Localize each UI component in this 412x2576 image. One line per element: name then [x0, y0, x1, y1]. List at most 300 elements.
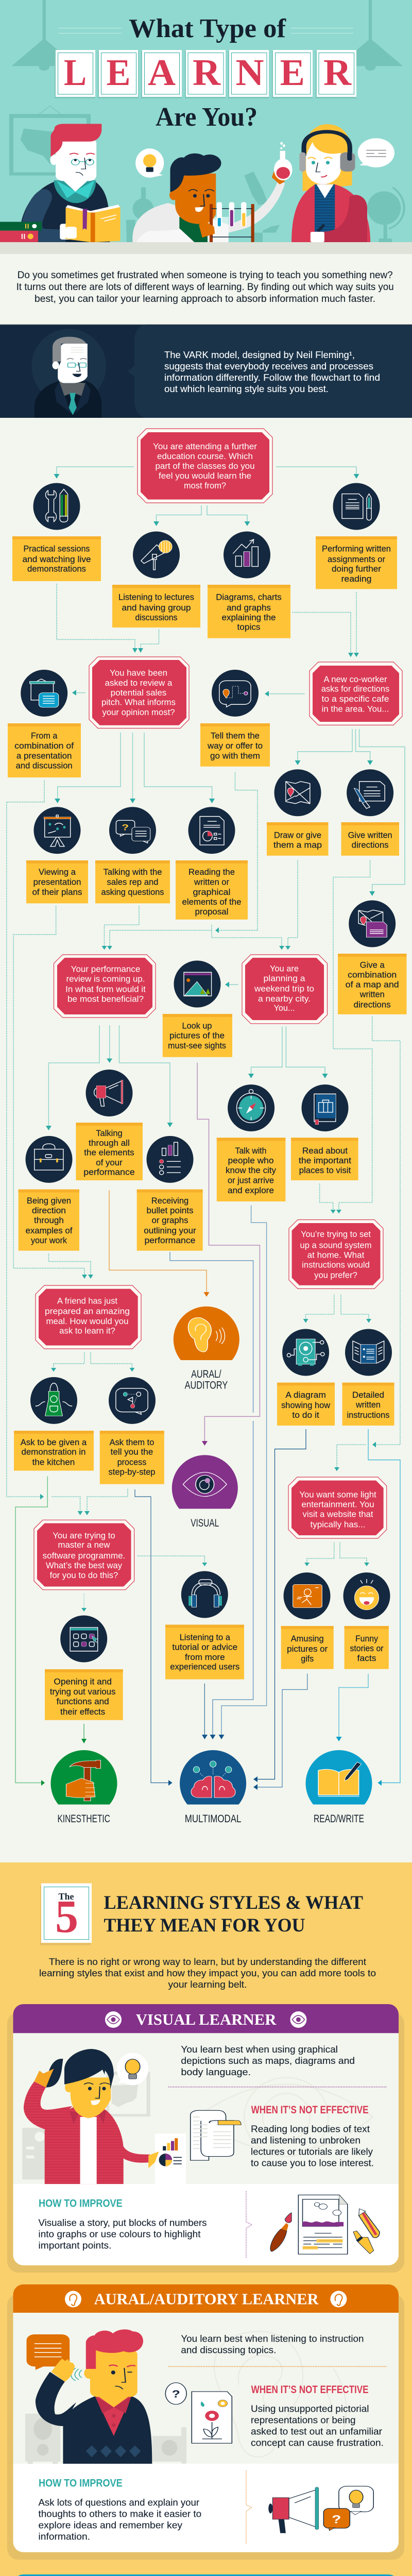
- intro text: your learning belt.: [168, 1979, 247, 1990]
- icon: presentation board: [34, 807, 80, 854]
- how to improve: Visualise a story, put blocks of numbers: [38, 2217, 207, 2228]
- icon: headphones: [181, 1571, 228, 1618]
- label box: and having group: [122, 603, 191, 613]
- label box: asking questions: [101, 888, 164, 897]
- VARK text: [164, 350, 380, 394]
- arrow: question 1 to practical: [54, 467, 134, 479]
- illustration: student with headphones: [291, 124, 394, 242]
- option: combination of map and written: [338, 901, 407, 1014]
- question 4: In what form would it: [65, 985, 146, 994]
- VARK text: information differently. Follow the flowchart to find: [164, 372, 380, 383]
- label box: [277, 1383, 335, 1426]
- label box: [14, 1431, 94, 1471]
- option: a diagram: [277, 1329, 335, 1426]
- VARK text: suggests that everybody receives and processes: [164, 361, 373, 371]
- label: [185, 1368, 228, 1391]
- question 5: You...: [274, 1004, 295, 1013]
- label box: doing further: [332, 565, 382, 574]
- icon: folded map: [274, 769, 321, 816]
- label box: your work: [31, 1236, 67, 1245]
- label box: sales rep and: [107, 878, 159, 887]
- option: read about places: [291, 1084, 358, 1180]
- label box: know the city: [226, 1166, 277, 1175]
- panel: hero: [0, 0, 412, 254]
- icon: board and chat: [21, 670, 67, 717]
- label box: the kitchen: [32, 1458, 75, 1467]
- how to improve: thoughts to others to make it easier to: [38, 2509, 201, 2519]
- label box: and explore: [228, 1186, 274, 1195]
- label box: [267, 822, 329, 856]
- heading: LEARNER letter cards: E: [106, 52, 131, 93]
- arrow: reading to weekend trip: [212, 925, 284, 950]
- label box: through: [34, 1216, 64, 1225]
- how to improve: [38, 2470, 252, 2544]
- label box: [200, 723, 270, 767]
- header: [13, 2574, 399, 2576]
- question 2: pitch. What informs: [101, 698, 176, 707]
- arrow: sound system to written instructions: [341, 1295, 371, 1323]
- question 2: asked to review a: [105, 679, 173, 688]
- label box: [163, 1014, 232, 1057]
- icon: running figure screen: [283, 1572, 331, 1619]
- intro text: There is no right or wrong way to learn, but by understanding the different: [49, 1956, 366, 1967]
- arrow: weekend trip to read about: [286, 1026, 328, 1078]
- label box: [95, 860, 170, 903]
- label box: [338, 954, 407, 1014]
- label box: process: [117, 1458, 146, 1467]
- option: viewing a presentation: [26, 807, 88, 903]
- label box: experienced users: [170, 1663, 239, 1672]
- heading: LEARNER letter cards: A: [148, 52, 176, 93]
- icon: chat with route: [109, 1377, 156, 1424]
- arrow: question 1 to lectures: [153, 505, 201, 526]
- option: practical sessions: [12, 483, 101, 581]
- question 6: You’re trying to set: [301, 1230, 371, 1239]
- label box: written: [359, 990, 385, 999]
- arrow: performance to bullet points: [119, 1025, 173, 1127]
- label: AURAL/: [191, 1368, 221, 1380]
- label box: direction: [32, 1206, 66, 1215]
- arrow: combination to friend meal: [7, 781, 44, 1499]
- when it's not effective: representations or being: [251, 2415, 355, 2426]
- result: multimodal: [180, 1750, 246, 1825]
- illustration: paintbrush, document, pencil, highlighter: [270, 2195, 380, 2254]
- option: pictures or gifs: [281, 1572, 334, 1669]
- question 5: weekend trip to: [254, 985, 314, 994]
- icon: brain: [191, 1761, 235, 1798]
- option: examples of work: [19, 1136, 79, 1251]
- arrow: talk with people to multimodal: [218, 1206, 267, 1739]
- question 9: typically has...: [310, 1520, 366, 1530]
- label box: outlining your: [144, 1226, 196, 1235]
- question 1: You are attending a further: [153, 442, 258, 451]
- question 7: ask to learn it?: [59, 1326, 115, 1335]
- illustration: aural learner character: [25, 2329, 232, 2464]
- question 1: feel you would learn the: [159, 471, 251, 481]
- question 9: visit a website that: [303, 1510, 373, 1519]
- card: read write learner: [7, 2574, 404, 2576]
- label box: functions and: [57, 1697, 109, 1706]
- VARK text: out which learning style suits you best.: [164, 384, 329, 394]
- label box: and graphs: [227, 603, 271, 613]
- question 8: [34, 1520, 134, 1590]
- intro text: [39, 1956, 376, 1990]
- label box: Being given: [27, 1196, 71, 1206]
- question 3: [310, 662, 402, 725]
- option: talk with people: [217, 1084, 285, 1201]
- question 9: You want some light: [299, 1490, 376, 1500]
- option: opening it: [45, 1616, 123, 1720]
- label box: Opening it and: [54, 1677, 112, 1687]
- label box: combination: [348, 971, 397, 980]
- label box: Listening to lectures: [118, 593, 194, 602]
- option: talking through: [76, 1070, 143, 1180]
- label box: them a map: [273, 841, 322, 850]
- question 4: [54, 955, 156, 1018]
- label box: directions: [352, 841, 389, 850]
- label box: of your: [96, 1158, 123, 1167]
- label box: from more: [185, 1653, 225, 1662]
- option: demonstration: [14, 1377, 94, 1471]
- label box: [76, 1123, 143, 1180]
- result: aural: [174, 1307, 239, 1391]
- icon: map and note: [349, 901, 396, 947]
- header: AURAL/AUDITORY LEARNER: [94, 2290, 319, 2308]
- arrow: entertainment to funny stories: [340, 1543, 369, 1566]
- option: talking with sales rep: [95, 807, 170, 903]
- result: kinesthetic: [51, 1750, 117, 1825]
- card: The 5: 5: [55, 1891, 78, 1942]
- label box: stories or: [350, 1644, 384, 1653]
- arrow: sales pitch to talking: [130, 733, 135, 803]
- icon: eye: [183, 1472, 227, 1497]
- question 8: You are trying to: [53, 1531, 115, 1540]
- panel: VARK model: [0, 324, 412, 418]
- label box: [281, 1626, 334, 1669]
- question 9: entertainment. You: [301, 1500, 374, 1509]
- heading: learning styles: THEY MEAN FOR YOU: [104, 1915, 305, 1936]
- intro paragraph: best, you can tailor your learning approach to absorb information much faster.: [35, 293, 375, 304]
- arrow: step by step to software: [84, 1489, 128, 1515]
- label box: [137, 1190, 203, 1251]
- label box: reading: [341, 574, 372, 584]
- label box: to do it: [292, 1411, 319, 1420]
- how to improve: into graphs or use colours to highlight: [38, 2229, 201, 2239]
- label box: [341, 822, 399, 856]
- label box: graphical: [193, 888, 231, 897]
- heading: Are You?: Are You?: [156, 103, 258, 132]
- arrow: performance to examples: [46, 1025, 99, 1130]
- description: depictions such as maps, diagrams and: [181, 2056, 355, 2066]
- label box: discussions: [135, 613, 177, 622]
- label box: proposal: [195, 907, 229, 917]
- icon: bar chart: [224, 532, 270, 578]
- question 2: [89, 657, 189, 728]
- icon: brochure: [345, 1329, 392, 1376]
- when it's not effective: and listening to unbroken: [251, 2135, 360, 2145]
- label box: Receiving: [151, 1196, 188, 1206]
- heading: LEARNER letter cards: L: [64, 52, 87, 93]
- label box: Talk with: [235, 1146, 267, 1156]
- arrow: diagrams to directions: [293, 613, 353, 657]
- question 9: [288, 1477, 387, 1538]
- how to improve: Ask lots of questions and explain your: [38, 2498, 199, 2508]
- label box: a presentation: [16, 752, 72, 761]
- arrow: sales pitch to viewing: [55, 733, 121, 803]
- illustration: aural learner character: ?: [172, 2388, 180, 2400]
- when it's not effective: [251, 2384, 384, 2448]
- label box: A diagram: [285, 1391, 326, 1400]
- label box: Reading the: [188, 868, 235, 877]
- how to improve: HOW TO IMPROVE: [39, 2198, 123, 2209]
- question 8: for you to do this?: [50, 1571, 118, 1580]
- question 6: instructions would: [302, 1261, 370, 1270]
- label box: Listening to a: [180, 1633, 231, 1642]
- label box: Detailed: [352, 1391, 384, 1400]
- illustration: reading man with book stack: [0, 124, 121, 242]
- label box: Tell them the: [211, 732, 260, 741]
- label box: [45, 1669, 123, 1720]
- intro paragraph: [16, 269, 394, 304]
- label box: facts: [357, 1654, 376, 1663]
- question 4: review is coming up.: [66, 975, 145, 984]
- label box: performance: [83, 1167, 135, 1177]
- label box: tutorial or advice: [173, 1642, 237, 1652]
- arrow: directions to tell them: [265, 691, 305, 697]
- label box: [345, 1626, 389, 1669]
- icon: app grid: [60, 1616, 107, 1662]
- label box: pictures of the: [169, 1031, 225, 1041]
- question 3: in the area. You...: [322, 705, 389, 714]
- icon: document and pen: [333, 483, 380, 530]
- label box: Draw or give: [274, 831, 321, 840]
- question 6: at home. What: [307, 1251, 365, 1260]
- arrow: funny stories to read write: [336, 1674, 368, 1741]
- arrow: tutorial to multimodal: [202, 1684, 208, 1739]
- question 2: You have been: [110, 669, 167, 678]
- arrow: pictures to visual result: [197, 1062, 260, 1446]
- label box: Diagrams, charts: [216, 593, 282, 602]
- question 7: prepared an amazing: [45, 1307, 130, 1316]
- arrow: friend meal to step by step: [91, 1352, 135, 1371]
- icon: document with pie chart: [188, 807, 235, 854]
- option: step by step: [100, 1377, 164, 1484]
- label box: bullet points: [146, 1206, 194, 1215]
- how to improve: HOW TO IMPROVE: [39, 2477, 123, 2489]
- description: body language.: [181, 2067, 251, 2077]
- when it's not effective: [251, 2104, 374, 2168]
- question 1: [138, 429, 272, 503]
- label box: Talking with the: [103, 868, 162, 877]
- arrow: sales pitch to combination: [72, 690, 85, 696]
- illustration: scientist with test tubes: [132, 142, 293, 242]
- option: tell them: [200, 670, 270, 767]
- arrow: read about to sound system: [320, 1184, 336, 1214]
- question 1: part of the classes do you: [156, 462, 254, 471]
- label box: From a: [31, 732, 58, 741]
- icon: wrench and pencil: [33, 483, 80, 530]
- icon: question chat: [109, 807, 156, 854]
- illustration: Neil Fleming portrait: [31, 329, 106, 418]
- question 1: most from?: [184, 481, 226, 490]
- label: READ/WRITE: [314, 1813, 364, 1825]
- option: bullet points: [137, 1136, 203, 1251]
- when it's not effective: Using unsupported pictorial: [251, 2404, 369, 2414]
- header: [13, 2004, 399, 2033]
- option: tutorial: [165, 1571, 244, 1680]
- icon: chart and list: [146, 1136, 194, 1183]
- label box: Viewing a: [39, 868, 76, 877]
- question 5: You are: [270, 964, 299, 974]
- question 5: [242, 955, 328, 1024]
- label box: and watching live: [23, 555, 91, 564]
- label box: way or offer to: [207, 741, 263, 751]
- label box: places to visit: [299, 1166, 351, 1175]
- label box: [100, 1431, 164, 1484]
- label box: [217, 1138, 285, 1201]
- arrow: diagram to multimodal: [253, 1429, 306, 1782]
- watermark eye: [197, 2077, 373, 2157]
- flowchart: [7, 429, 407, 1825]
- label box: Read about: [302, 1146, 348, 1156]
- arrow: opening it to kinesthetic: [81, 1724, 87, 1743]
- label box: showing how: [281, 1401, 330, 1410]
- intro paragraph: Do you sometimes get frustrated when someone is trying to teach you something new?: [18, 269, 393, 281]
- question 8: What’s the best way: [46, 1561, 123, 1570]
- question 2: potential sales: [111, 688, 166, 698]
- heading: LEARNER letter cards: N: [236, 52, 264, 93]
- when it's not effective: to cause you to lose interest.: [251, 2158, 374, 2168]
- question 6: [289, 1220, 383, 1289]
- how to improve: important points.: [38, 2240, 111, 2250]
- arrow: weekend trip to pictures: [225, 982, 238, 987]
- icon: route in speech bubble: [212, 670, 259, 717]
- option: written directions: [341, 769, 399, 856]
- label box: Practical sessions: [24, 545, 90, 554]
- result: visual: [172, 1455, 238, 1529]
- option: detailed instructions: [342, 1329, 394, 1426]
- label box: [165, 1625, 244, 1680]
- label box: [112, 585, 200, 628]
- icon: briefcase: [26, 1136, 72, 1183]
- question 3: to a specific cafe: [321, 694, 389, 704]
- label box: written: [355, 1400, 381, 1410]
- VARK text: The VARK model, designed by Neil Fleming¹,: [164, 350, 355, 360]
- arrow: bullet points to multimodal: [170, 1252, 253, 1739]
- icon: megaphone: [85, 1070, 133, 1116]
- arrow: viewing to friend meal: [13, 906, 87, 1279]
- question 8: software programme.: [43, 1551, 125, 1561]
- result: read write: [306, 1750, 372, 1825]
- arrow: entertainment to pictures or gifs: [304, 1543, 334, 1566]
- label: VISUAL: [191, 1517, 219, 1529]
- label box: must-see sights: [168, 1041, 226, 1050]
- label box: step-by-step: [108, 1468, 156, 1477]
- label box: go with them: [210, 752, 260, 761]
- icon: question chat: ?: [122, 823, 129, 833]
- description: You learn best when listening to instruction: [181, 2334, 364, 2344]
- arrow: demonstration to kinesthetic: [15, 1476, 47, 1786]
- option: draw a map: [267, 769, 329, 856]
- arrow: software to opening it: [81, 1594, 87, 1612]
- label box: demonstration in: [22, 1448, 85, 1457]
- label: MULTIMODAL: [185, 1813, 241, 1825]
- card: visual learner: [7, 2004, 404, 2273]
- when it's not effective: WHEN IT’S NOT EFFECTIVE: [251, 2104, 369, 2116]
- label box: [19, 1190, 79, 1251]
- question 7: [36, 1285, 141, 1349]
- label box: explaining the: [221, 613, 276, 622]
- illustration: visual learner character: [22, 2049, 241, 2184]
- header: VISUAL LEARNER: [136, 2010, 277, 2028]
- option: combination of presentation: [8, 670, 81, 777]
- question 7: meal. How would you: [46, 1317, 129, 1326]
- label box: people who: [228, 1156, 274, 1165]
- label box: directions: [354, 1001, 391, 1010]
- label box: [26, 860, 88, 903]
- arrow: sound system to diagram: [303, 1295, 334, 1323]
- card: The 5: The: [59, 1891, 74, 1902]
- icon: apron: [30, 1377, 77, 1424]
- label box: their effects: [60, 1707, 105, 1717]
- arrow: map to weekend trip: [285, 860, 298, 950]
- label box: elements of the: [182, 897, 241, 907]
- arrow: directions to map: [295, 729, 352, 765]
- arrow: combination of map to entertainment: [334, 1016, 400, 1471]
- label box: Performing written: [322, 545, 391, 554]
- label box: Talking: [96, 1129, 123, 1138]
- arrow: written to directions: [354, 592, 359, 657]
- icon: picture of mountains: [174, 960, 220, 1008]
- when it's not effective: Reading long bodies of text: [251, 2124, 370, 2134]
- question 1: education course. Which: [157, 452, 253, 461]
- when it's not effective: WHEN IT’S NOT EFFECTIVE: [251, 2384, 369, 2396]
- label box: [176, 860, 248, 920]
- icon: travel guide book: [302, 1084, 348, 1131]
- label box: combination of: [14, 741, 74, 751]
- label box: through all: [89, 1139, 130, 1148]
- label box: Ask to be given a: [21, 1438, 87, 1447]
- arrow: weekend trip to talk with people: [248, 1026, 282, 1078]
- arrow: sales pitch to reading: [144, 733, 215, 803]
- label box: Look up: [182, 1022, 212, 1031]
- arrow: continuation to software: [52, 1497, 83, 1515]
- label box: [8, 723, 81, 777]
- arrow: instructions to read write: [368, 1429, 400, 1786]
- arrow: talking through to aural result: [109, 1190, 209, 1297]
- description: and discussing topics.: [181, 2345, 276, 2355]
- header: [13, 2284, 399, 2313]
- icon: book and pen: [318, 1762, 361, 1797]
- label box: examples of: [26, 1226, 73, 1235]
- description: [168, 2044, 387, 2087]
- icon: microphone: [133, 532, 180, 578]
- when it's not effective: lectures or tutorials are likely: [251, 2146, 373, 2157]
- arrow: being given direction to friend meal: [48, 1253, 93, 1279]
- arrow: question 1 to written: [276, 467, 359, 479]
- background lamps, frame and lab props: [9, 0, 404, 242]
- label box: topics: [237, 622, 261, 632]
- arrow: friend meal to demonstration: [51, 1352, 84, 1371]
- how to improve: [38, 2191, 252, 2258]
- arrow: performance to talking through: [107, 1025, 112, 1063]
- illustration: megaphone and bubbles: [268, 2486, 373, 2533]
- when it's not effective: concept can cause frustration.: [251, 2438, 384, 2448]
- label box: Give a: [360, 961, 385, 970]
- illustration: megaphone and bubbles: ?: [332, 2513, 341, 2526]
- heading: LEARNER letter cards: R: [193, 52, 221, 93]
- watermark ear: [214, 2331, 346, 2457]
